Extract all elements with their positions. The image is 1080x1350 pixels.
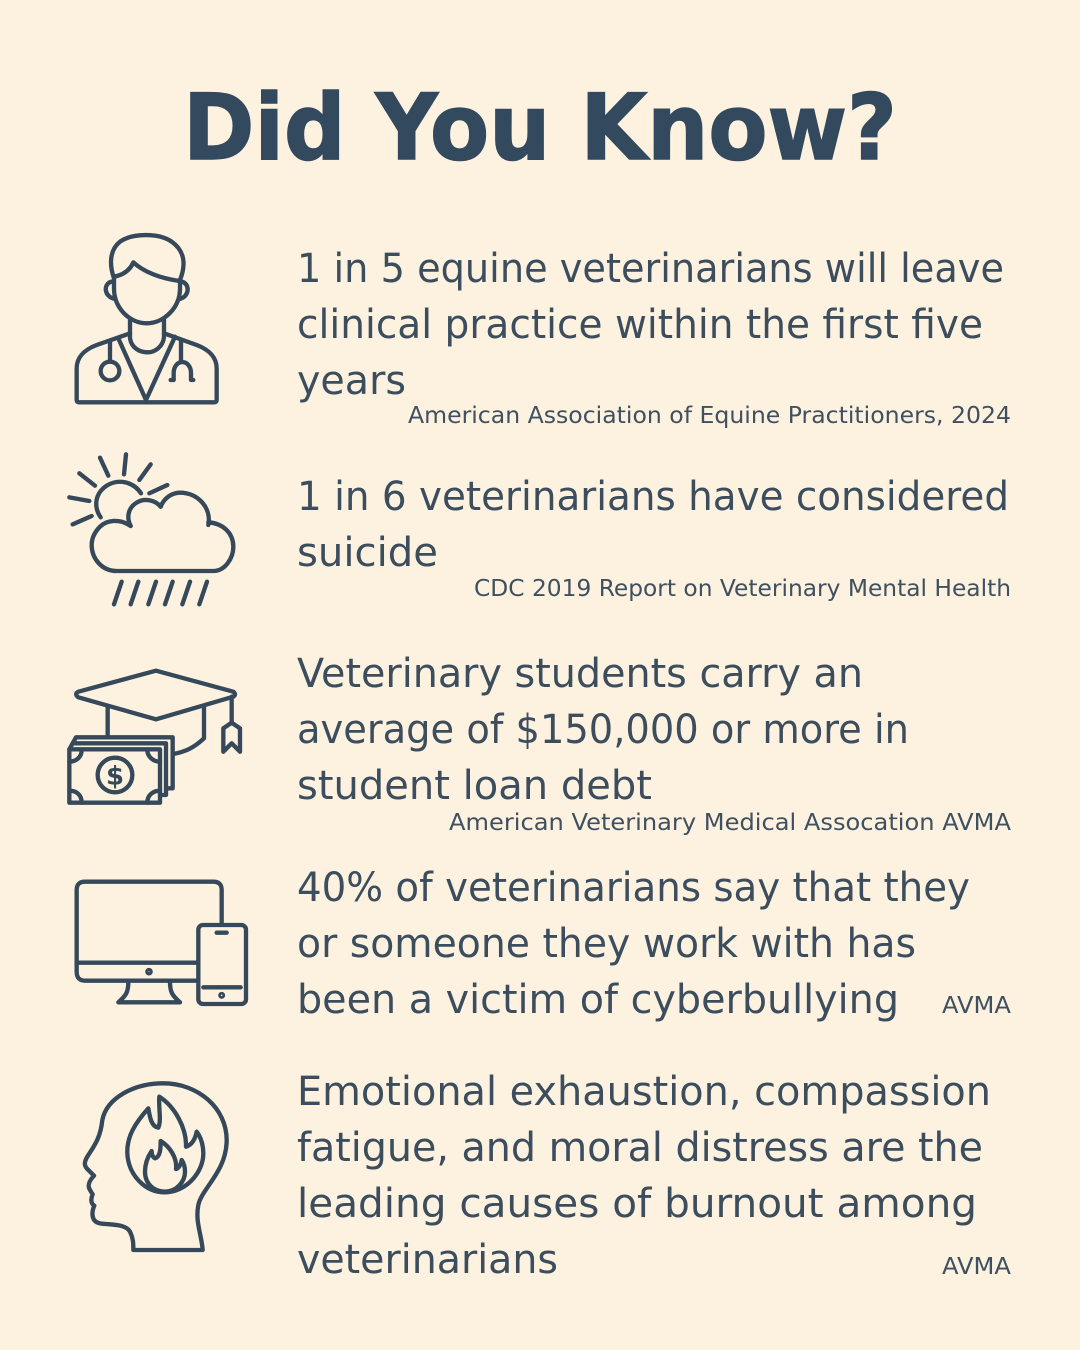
statistic text <box>297 863 970 1023</box>
statistic text: fatigue, and moral distress are the <box>297 1123 983 1171</box>
panel: suicide consideration <box>69 454 1011 604</box>
statistic text: suicide <box>297 528 438 576</box>
source: AVMA <box>942 991 1011 1019</box>
statistic text <box>297 244 1004 404</box>
panel: cyberbullying <box>77 863 1011 1023</box>
statistic text: student loan debt <box>297 761 652 809</box>
statistic text: 1 in 5 equine veterinarians will leave <box>297 244 1004 292</box>
source: CDC 2019 Report on Veterinary Mental Health <box>474 574 1011 602</box>
statistic text <box>297 1067 991 1283</box>
icon: doctor with stethoscope <box>77 235 217 402</box>
icon: desktop monitor and phone <box>77 882 246 1004</box>
panel: clinical practice attrition <box>77 235 1011 429</box>
source: AVMA <box>942 1252 1011 1280</box>
statistic text: been a victim of cyberbullying <box>297 975 899 1023</box>
statistic text <box>297 649 909 809</box>
statistic text: Emotional exhaustion, compassion <box>297 1067 991 1115</box>
statistic text: 40% of veterinarians say that they <box>297 863 970 911</box>
icon: sun behind rain cloud <box>69 454 233 604</box>
source: American Veterinary Medical Assocation AVMA <box>449 808 1011 836</box>
statistic text: clinical practice within the first five <box>297 300 983 348</box>
title: Did You Know? <box>183 76 897 181</box>
statistic text: veterinarians <box>297 1235 558 1283</box>
icon: graduation cap and money: $ <box>106 761 124 791</box>
statistic text: or someone they work with has <box>297 919 916 967</box>
statistic text: Veterinary students carry an <box>297 649 863 697</box>
statistic text: average of $150,000 or more in <box>297 705 909 753</box>
source: American Association of Equine Practitioners, 2024 <box>408 401 1011 429</box>
icon: graduation cap and money <box>69 671 240 803</box>
statistic text: 1 in 6 veterinarians have considered <box>297 472 1009 520</box>
panel: burnout causes <box>85 1067 1011 1283</box>
statistic text: years <box>297 356 406 404</box>
icon: head with flame <box>85 1083 227 1250</box>
statistic text: leading causes of burnout among <box>297 1179 977 1227</box>
statistic text <box>297 472 1009 576</box>
panel: student loan debt <box>69 649 1011 836</box>
